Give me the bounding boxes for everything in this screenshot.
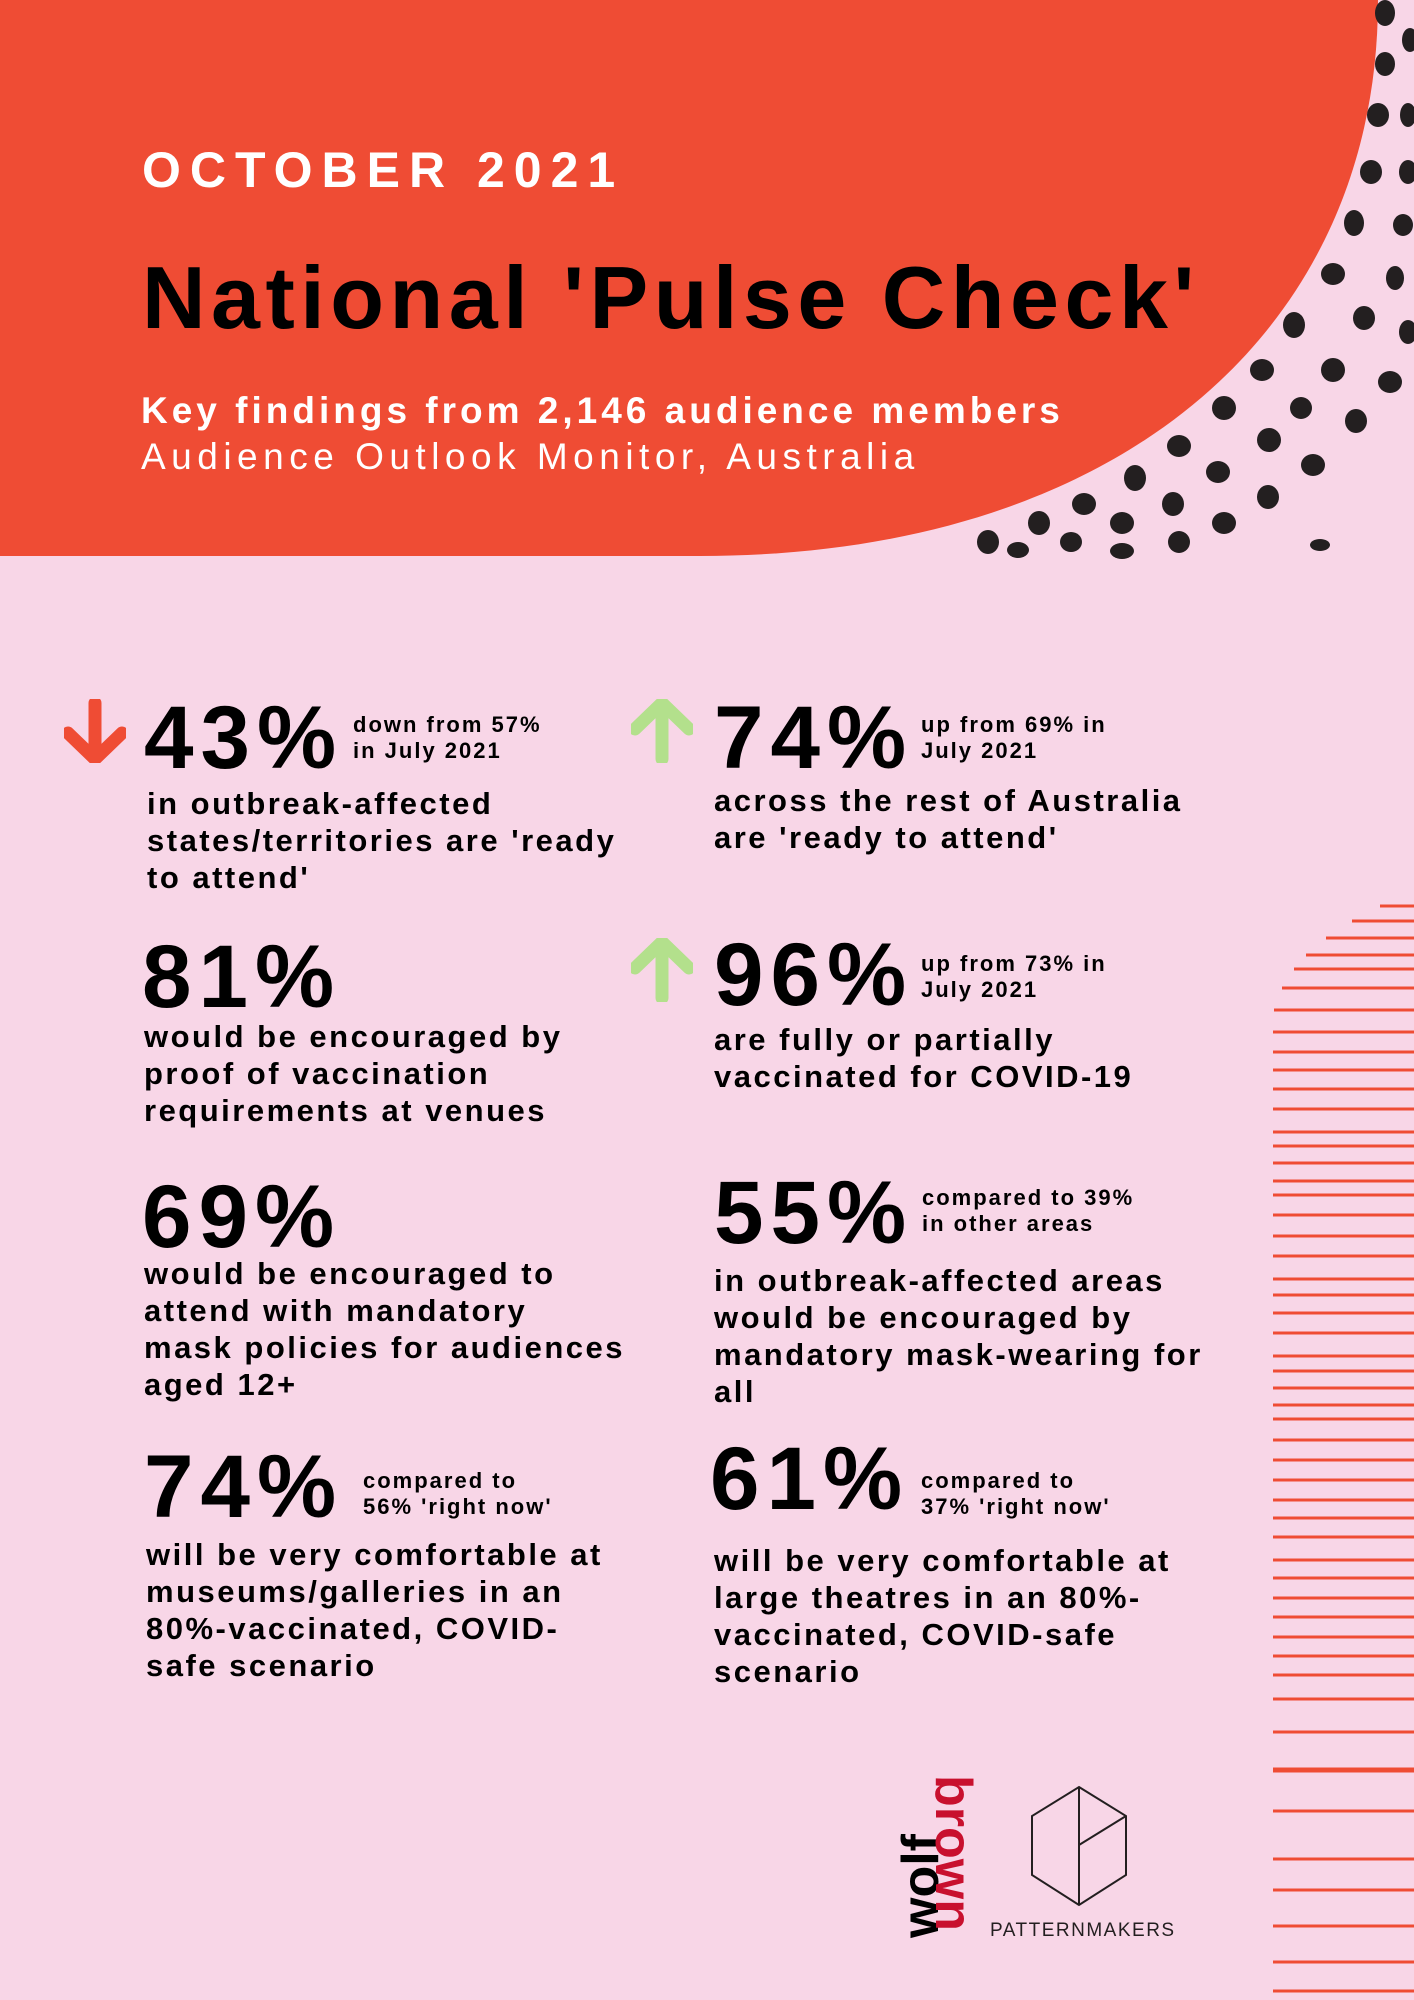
logo: patternmakers: PATTERNMAKERS <box>990 1920 1176 1941</box>
dot pattern <box>977 0 1414 559</box>
stat: 74% rest of Australia: across the rest of Australia <box>714 783 1183 818</box>
stat: 55%: would be encouraged by <box>714 1300 1132 1335</box>
stat: 61%: will be very comfortable at <box>714 1543 1171 1578</box>
stat: 55%: compared to 39% <box>922 1185 1134 1210</box>
stat: 55%: in other areas <box>922 1211 1094 1236</box>
stat: 69%: mask policies for audiences <box>144 1330 625 1365</box>
stat: 43%: in outbreak-affected <box>147 786 493 821</box>
stripe pattern <box>1273 906 1414 1991</box>
stat: 43%: states/territories are 'ready <box>147 823 616 858</box>
header: date: OCTOBER 2021 <box>142 142 624 198</box>
stat: 81% <box>142 926 562 1128</box>
stat: 74% rest of Australia: 74% <box>714 687 913 787</box>
stat: 96%: up from 73% in <box>921 951 1107 976</box>
stat: 96%: 96% <box>714 924 913 1024</box>
header: subtitle <box>141 390 1064 477</box>
stat: 96%: are fully or partially <box>714 1022 1055 1057</box>
stat: 74% museums: safe scenario <box>146 1648 377 1683</box>
stat: 43% <box>64 687 616 895</box>
stat: 81%: 81% <box>142 926 341 1026</box>
stat: 43%: down from 57% <box>353 712 542 737</box>
stat: 55%: in outbreak-affected areas <box>714 1263 1165 1298</box>
stat: 61%: compared to <box>921 1468 1075 1493</box>
stat: 74% museums: museums/galleries in an <box>146 1574 564 1609</box>
stat: 74% museums <box>144 1436 603 1683</box>
icon: green up arrow <box>631 938 693 1002</box>
header: subtitle: Audience Outlook Monitor, Australia <box>141 436 920 477</box>
stat: 61%: 61% <box>710 1428 909 1528</box>
stat: 96%: July 2021 <box>921 977 1038 1002</box>
stat: 74% museums: compared to <box>363 1468 517 1493</box>
logo: wolf brown <box>892 1775 980 1939</box>
stat: 69%: aged 12+ <box>144 1367 298 1402</box>
stat: 43%: 43% <box>144 687 343 787</box>
stat: 61%: scenario <box>714 1654 862 1689</box>
stat: 81%: requirements at venues <box>144 1093 547 1128</box>
header red shape <box>0 0 1378 556</box>
stat: 74% museums: 56% 'right now' <box>363 1494 553 1519</box>
stat: 69%: 69% <box>142 1166 341 1266</box>
stat: 81%: would be encouraged by <box>144 1019 562 1054</box>
stat: 55% <box>714 1162 1203 1409</box>
icon: red down arrow <box>64 699 126 763</box>
header: title: National 'Pulse Check' <box>142 248 1200 347</box>
stat: 74% rest of Australia <box>631 687 1183 855</box>
header: subtitle: Key findings from 2,146 audience members <box>141 390 1064 431</box>
stat: 69%: would be encouraged to <box>144 1256 556 1291</box>
logo: wolf brown: wolf <box>892 1833 950 1939</box>
stat: 43%: to attend' <box>147 860 310 895</box>
stat: 61% <box>710 1428 1171 1689</box>
stat: 43%: in July 2021 <box>353 738 502 763</box>
stat: 74% museums: will be very comfortable at <box>146 1537 603 1572</box>
stat: 96% <box>631 924 1133 1094</box>
stat: 61%: large theatres in an 80%- <box>714 1580 1142 1615</box>
stat: 74% rest of Australia: up from 69% in <box>921 712 1107 737</box>
stat: 61%: 37% 'right now' <box>921 1494 1111 1519</box>
stat: 74% museums: 74% <box>144 1436 343 1536</box>
stat: 96%: vaccinated for COVID-19 <box>714 1059 1133 1094</box>
stat: 74% museums: 80%-vaccinated, COVID- <box>146 1611 559 1646</box>
stat: 69%: attend with mandatory <box>144 1293 527 1328</box>
stat: 74% rest of Australia: are 'ready to attend' <box>714 820 1059 855</box>
stat: 55%: all <box>714 1374 756 1409</box>
stat: 61%: vaccinated, COVID-safe <box>714 1617 1117 1652</box>
stat: 69% <box>142 1166 625 1402</box>
stat: 81%: proof of vaccination <box>144 1056 490 1091</box>
stat: 74% rest of Australia: July 2021 <box>921 738 1038 763</box>
stat: 55%: mandatory mask-wearing for <box>714 1337 1203 1372</box>
icon: green up arrow <box>631 699 693 763</box>
logo: patternmakers <box>990 1786 1176 1941</box>
stat: 55%: 55% <box>714 1162 913 1262</box>
